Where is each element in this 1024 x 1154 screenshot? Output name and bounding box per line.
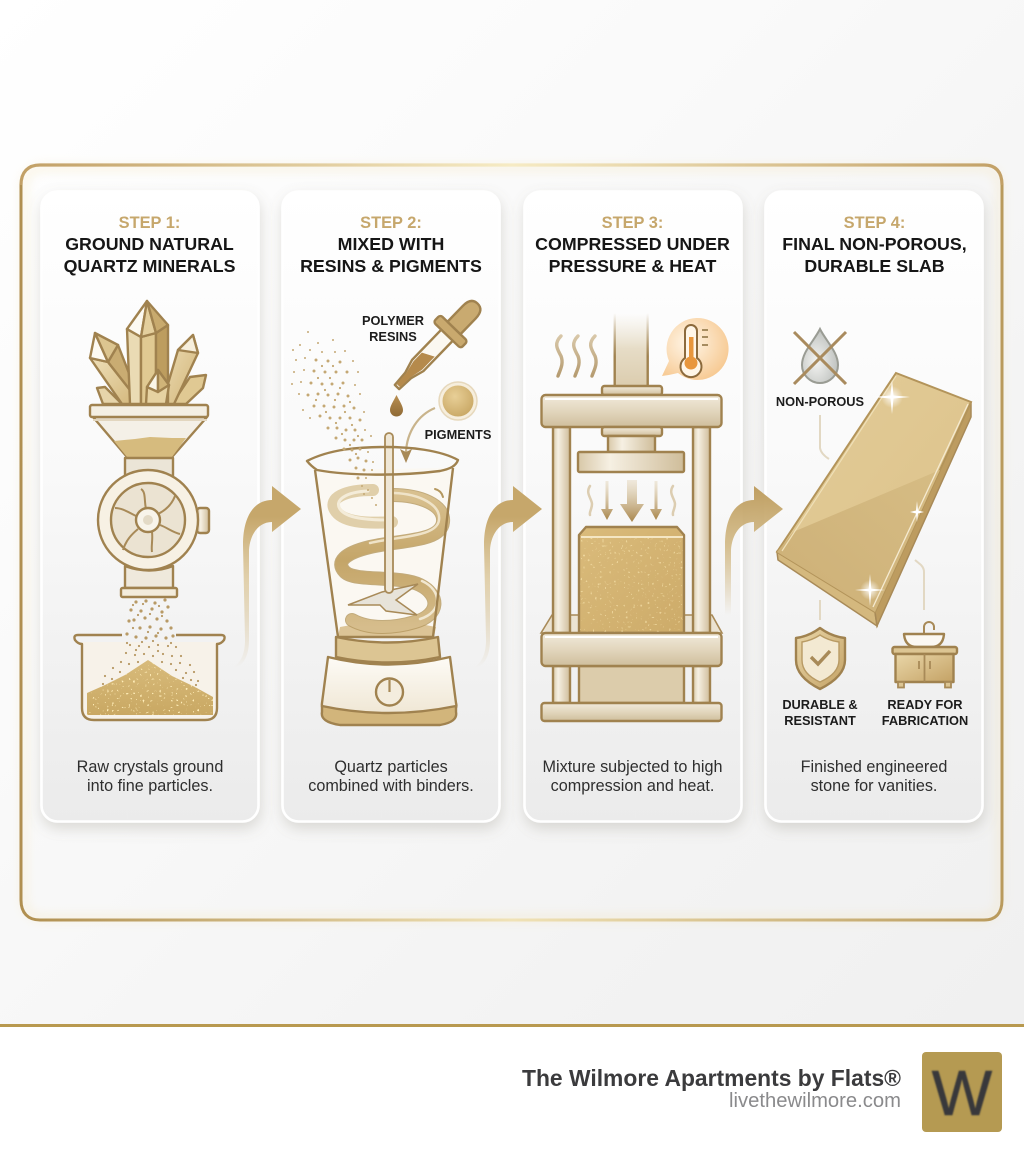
step 4 heading bbox=[782, 214, 967, 276]
footer logo: W bbox=[932, 1057, 993, 1129]
step 1 caption bbox=[77, 758, 223, 795]
step 4 caption: Finished engineered bbox=[801, 758, 947, 776]
icon: bathroom vanity bbox=[892, 622, 957, 688]
leader line: durable bbox=[819, 600, 821, 620]
mixer blades bbox=[348, 584, 418, 615]
step 2 heading bbox=[300, 214, 482, 276]
step 3 caption: compression and heat. bbox=[551, 777, 714, 795]
icon: resin drop bbox=[390, 395, 403, 417]
top beam bbox=[542, 395, 722, 427]
label: non-porous: NON-POROUS bbox=[776, 394, 865, 409]
step 3 heading: COMPRESSED UNDER bbox=[535, 234, 730, 254]
icon: bowl of quartz sand bbox=[74, 635, 225, 720]
icon: grinder wheel bbox=[98, 470, 209, 570]
leader line: fabrication bbox=[915, 560, 924, 610]
arrow: pigment into beaker bbox=[400, 408, 435, 463]
columns bbox=[553, 427, 570, 633]
step 1 heading: STEP 1: bbox=[119, 214, 180, 232]
lower base bbox=[579, 666, 684, 703]
leader line: non-porous bbox=[820, 415, 829, 459]
sparkles bbox=[855, 380, 924, 606]
step 1 card bbox=[42, 192, 258, 822]
icon: shield with check bbox=[796, 628, 845, 689]
icon: hydraulic press bbox=[541, 313, 722, 721]
icon: side heat waves bbox=[588, 486, 675, 515]
label: ready for fabrication bbox=[882, 697, 968, 728]
press rod bbox=[614, 313, 648, 386]
outer gold frame bbox=[21, 165, 1002, 926]
icon: quartz crystals bbox=[90, 301, 206, 404]
step 4 heading: STEP 4: bbox=[844, 214, 905, 232]
step 2 card bbox=[282, 192, 500, 822]
footer bbox=[0, 1024, 1024, 1154]
falling particles bbox=[103, 600, 198, 685]
label: durable and resistant: RESISTANT bbox=[784, 713, 856, 728]
label: ready for fabrication: READY FOR bbox=[887, 697, 963, 712]
step 4 caption: stone for vanities. bbox=[811, 777, 937, 795]
footer logo bbox=[922, 1052, 1002, 1132]
step 2 heading: STEP 2: bbox=[360, 214, 422, 232]
step 1 heading: QUARTZ MINERALS bbox=[64, 256, 236, 276]
swirl ribbon back strand bbox=[333, 490, 392, 523]
compressed block bbox=[579, 527, 684, 633]
step 2 heading: RESINS & PIGMENTS bbox=[300, 256, 482, 276]
panel: step 2 bbox=[282, 192, 500, 822]
platform back bbox=[541, 615, 722, 633]
arrows: downward pressure bbox=[601, 480, 662, 522]
label: pigments: PIGMENTS bbox=[425, 427, 492, 442]
icon: quartz slab bbox=[777, 373, 971, 626]
footer website: livethewilmore.com bbox=[729, 1090, 901, 1112]
panel: step 1 bbox=[42, 192, 258, 822]
step 3 heading: STEP 3: bbox=[602, 214, 663, 232]
floating quartz particles bbox=[292, 332, 376, 505]
step 1 heading: GROUND NATURAL bbox=[65, 234, 234, 254]
step 4 heading: FINAL NON-POROUS, bbox=[782, 234, 967, 254]
label: durable and resistant: DURABLE & bbox=[782, 697, 858, 712]
arrow: step 3 to step 4 bbox=[725, 486, 783, 615]
label: durable and resistant bbox=[782, 697, 858, 728]
icon: dropper bbox=[383, 290, 491, 400]
step 4 heading: DURABLE SLAB bbox=[804, 256, 945, 276]
step 3 caption bbox=[543, 758, 722, 795]
step 1 caption: Raw crystals ground bbox=[77, 758, 223, 776]
step 3 heading bbox=[535, 214, 730, 276]
label: polymer resins: RESINS bbox=[369, 329, 417, 344]
step 4 card bbox=[766, 192, 982, 822]
label: ready for fabrication: FABRICATION bbox=[882, 713, 968, 728]
step 1 heading bbox=[64, 214, 236, 276]
swirl ribbon front strand bbox=[341, 489, 443, 627]
icon: thermometer bubble bbox=[662, 318, 729, 380]
lower beam bbox=[542, 633, 722, 666]
step 2 caption: Quartz particles bbox=[334, 758, 448, 776]
icon: pigment disc bbox=[439, 382, 477, 420]
label: polymer resins bbox=[362, 313, 424, 344]
icon: blender base bbox=[322, 637, 456, 725]
arrow: step 2 to step 3 bbox=[473, 486, 542, 668]
panel: step 4 bbox=[766, 192, 982, 822]
icon: grinder outlet bbox=[121, 566, 177, 597]
icon: heat waves bbox=[557, 336, 596, 376]
icon: hopper with ground sand bbox=[90, 405, 208, 476]
step 3 card bbox=[524, 192, 742, 822]
label: polymer resins: POLYMER bbox=[362, 313, 424, 328]
mixer rod bbox=[385, 433, 393, 593]
arrow: step 1 to step 2 bbox=[232, 486, 301, 668]
step 2 caption bbox=[308, 758, 474, 795]
step 2 caption: combined with binders. bbox=[308, 777, 474, 795]
panel: step 3 bbox=[524, 192, 742, 822]
step 3 heading: PRESSURE & HEAT bbox=[549, 256, 716, 276]
icon: crossed water drop bbox=[794, 329, 846, 384]
icon: mixing beaker bbox=[307, 433, 458, 637]
step 1 caption: into fine particles. bbox=[87, 777, 213, 795]
step 2 heading: MIXED WITH bbox=[338, 234, 444, 254]
step 3 caption: Mixture subjected to high bbox=[543, 758, 722, 776]
footer brand name: The Wilmore Apartments by Flats® bbox=[522, 1065, 901, 1091]
step 4 caption bbox=[801, 758, 947, 795]
